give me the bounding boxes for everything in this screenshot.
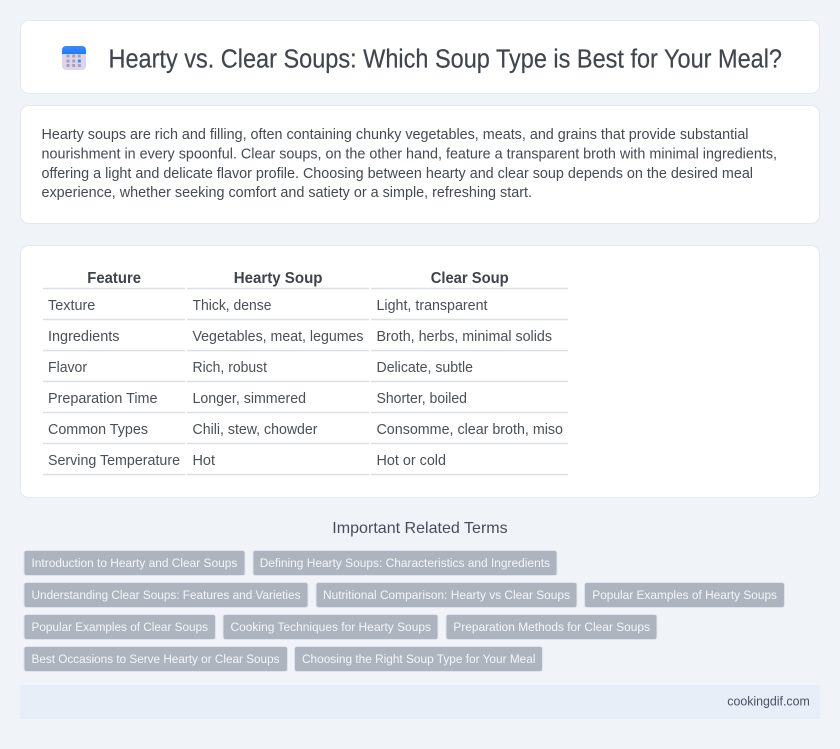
tag <box>584 582 784 608</box>
table row: preparation time <box>48 391 467 407</box>
table row: preparation time: Preparation Time <box>48 391 158 407</box>
tag: Introduction to Hearty and Clear Soups <box>32 556 237 570</box>
tag <box>446 614 657 640</box>
text block: introduction paragraph: offering a light and delicate flavor profile. Choosing between hearty and clear soup depends on the desired meal <box>42 166 753 182</box>
icon: calendar grid <box>62 46 86 70</box>
heading: important related terms: Important Related Terms <box>332 520 508 537</box>
table row: flavor: Rich, robust <box>192 360 267 376</box>
table row: serving temperature <box>48 453 446 469</box>
tag <box>24 550 245 576</box>
table row: ingredients <box>48 329 552 345</box>
tag: Choosing the Right Soup Type for Your Meal <box>302 652 536 666</box>
text block: introduction paragraph <box>42 127 777 201</box>
panel: comparison table <box>20 246 820 498</box>
tag <box>24 646 288 672</box>
tag: Nutritional Comparison: Hearty vs Clear Soups <box>323 588 570 602</box>
tag: Best Occasions to Serve Hearty or Clear Soups <box>32 652 280 666</box>
table row: preparation time: Shorter, boiled <box>376 391 467 407</box>
panel: related term tags <box>24 550 784 672</box>
text block: introduction paragraph: experience, whether seeking comfort and satiety or a simple, refreshing start. <box>42 185 532 201</box>
table row: ingredients: Vegetables, meat, legumes <box>192 329 364 345</box>
table row: serving temperature: Hot <box>192 453 215 469</box>
table header row: Clear Soup <box>431 270 509 287</box>
table row: preparation time: Longer, simmered <box>192 391 306 407</box>
table row: texture <box>48 298 488 314</box>
tag: Preparation Methods for Clear Soups <box>453 620 650 634</box>
footer source text: cookingdif.com <box>727 695 810 709</box>
table row: common types: Consomme, clear broth, miso <box>376 422 563 438</box>
tag: Understanding Clear Soups: Features and Varieties <box>32 588 300 602</box>
table header row <box>87 270 509 287</box>
table row: flavor <box>48 360 473 376</box>
text block: introduction paragraph: Hearty soups are rich and filling, often containing chunky vegetables, meats, and grains that provide substantial <box>42 127 748 143</box>
panel: introduction <box>20 106 820 224</box>
panel: footer <box>20 685 820 719</box>
table row: common types: Common Types <box>48 422 148 438</box>
tag <box>24 614 216 640</box>
tag <box>24 582 308 608</box>
table row: serving temperature: Serving Temperature <box>48 453 180 469</box>
table row: flavor: Delicate, subtle <box>376 360 473 376</box>
table row: ingredients: Broth, herbs, minimal solids <box>376 329 552 345</box>
table row: texture: Light, transparent <box>376 298 488 314</box>
table row: flavor: Flavor <box>48 360 87 376</box>
tag <box>223 614 438 640</box>
table row: texture: Texture <box>48 298 95 314</box>
table row: texture: Thick, dense <box>192 298 272 314</box>
table header row: Hearty Soup <box>234 270 323 287</box>
table row: common types <box>48 422 563 438</box>
tag: Popular Examples of Clear Soups <box>32 620 208 634</box>
title: Hearty vs. Clear Soups: Which Soup Type is Best for Your Meal? <box>108 46 782 74</box>
text block: introduction paragraph: nourishment in every spoonful. Clear soups, on the other hand, feature a transparent broth with minimal ingredients, <box>42 146 777 162</box>
tag: Popular Examples of Hearty Soups <box>592 588 777 602</box>
table row: ingredients: Ingredients <box>48 329 120 345</box>
tag <box>294 646 542 672</box>
tag: Cooking Techniques for Hearty Soups <box>230 620 431 634</box>
tag: Defining Hearty Soups: Characteristics and Ingredients <box>260 556 550 570</box>
tag <box>316 582 577 608</box>
table row: serving temperature: Hot or cold <box>376 453 446 469</box>
table header row: Feature <box>87 270 141 287</box>
tag <box>253 550 557 576</box>
table row: common types: Chili, stew, chowder <box>192 422 318 438</box>
panel: header <box>20 20 820 94</box>
